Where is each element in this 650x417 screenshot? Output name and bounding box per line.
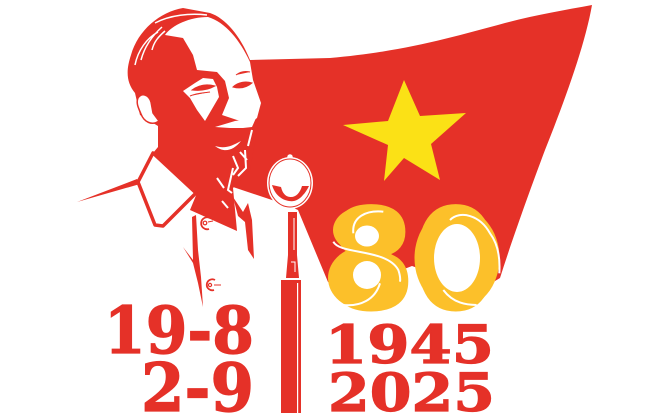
beard wisps: [217, 130, 252, 208]
white cheek: [183, 78, 219, 121]
lower lip highlight: [215, 141, 241, 150]
digit counters: [353, 224, 480, 292]
left eye: [190, 85, 215, 96]
digits text: 80: [329, 178, 498, 341]
number 80: [328, 178, 500, 341]
white ribbon accents: [333, 211, 500, 305]
shirt placket line: [183, 215, 203, 307]
yellow star: [343, 80, 466, 181]
ear: [137, 95, 159, 123]
microphone: [267, 154, 313, 413]
stem highlight: [291, 218, 295, 272]
right eye: [233, 71, 252, 88]
microphone base: [281, 280, 301, 413]
date 19-8: 19-8: [104, 293, 254, 369]
lower button: [207, 279, 221, 290]
digit bodies: [328, 206, 500, 310]
collar: [138, 153, 196, 226]
moustache highlight: [215, 118, 256, 128]
microphone head: [267, 154, 313, 209]
year 1945: 1945: [325, 315, 494, 376]
shoulder line: [77, 179, 140, 202]
white forehead and nose: [165, 17, 261, 123]
shirt lapel shadow: [233, 197, 254, 259]
red waving flag: [230, 5, 592, 290]
base highlight: [297, 283, 298, 413]
portrait of Ho Chi Minh: [77, 8, 261, 307]
microphone stem: [286, 212, 299, 278]
hair highlights: [135, 14, 207, 65]
upper button: [201, 217, 213, 229]
head, neck and chest shadow: [128, 8, 258, 231]
